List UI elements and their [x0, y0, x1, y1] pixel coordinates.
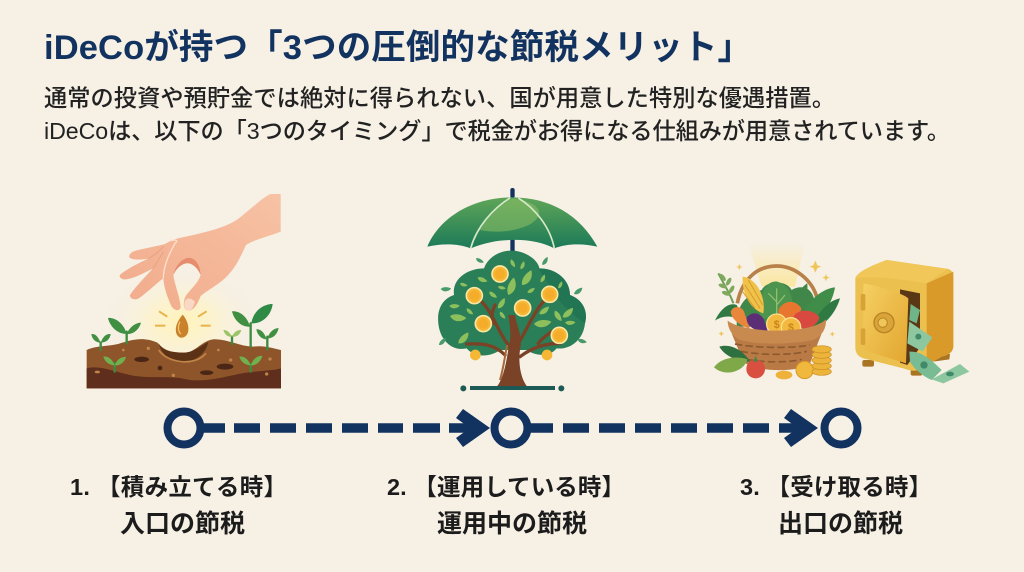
hand: [120, 194, 281, 311]
title: iDeCoが持つ「3つの圧倒的な節税メリット」: [44, 28, 752, 67]
timeline: [168, 409, 858, 447]
carrots, eggplant, tomato: [731, 307, 750, 329]
basket coins: [767, 314, 801, 337]
step 1 label: 1. 【積み立てる時】: [70, 474, 287, 500]
cash: [909, 304, 920, 323]
step 2 marker: [494, 412, 528, 444]
step 1 label: [70, 474, 287, 538]
intro text: iDeCoは、以下の「3つのタイミング」で税金がお得になる仕組みが用意されています。: [44, 118, 950, 144]
step 3 label: [740, 474, 932, 538]
arrow: step 1 to step 2: [200, 409, 490, 447]
step 1 label: 入口の節税: [120, 510, 245, 538]
ground: [470, 386, 555, 390]
arrow: step 2 to step 3: [527, 409, 818, 447]
step 3 marker: [824, 412, 858, 444]
intro text: 通常の投資や預貯金では絶対に得られない、国が用意した特別な優遇措置。: [44, 85, 835, 111]
step 3 label: 出口の節税: [778, 510, 903, 538]
seed and rays: [176, 315, 188, 338]
step 2 label: 2. 【運用している時】: [387, 474, 625, 500]
basket: [732, 333, 822, 370]
step 3 label: 3. 【受け取る時】: [740, 474, 932, 500]
icon: umbrella over coin tree: [427, 188, 597, 391]
icon: hand planting a seed: [87, 194, 281, 388]
step 2 label: 運用中の節税: [437, 510, 587, 538]
corn: [743, 277, 764, 313]
trunk: [497, 315, 527, 386]
icon: harvest basket: [714, 243, 840, 379]
greens: [737, 282, 823, 327]
coins: [492, 266, 508, 282]
basket coins: $: [788, 322, 794, 334]
step 1 marker: [168, 412, 200, 444]
basket coins: $: [774, 319, 780, 331]
intro text: [44, 85, 950, 144]
icon: gold safe with cash: [855, 260, 969, 383]
leaves: [449, 259, 576, 345]
canopy: [438, 251, 586, 355]
sprouts: [101, 323, 267, 372]
step 2 label: [387, 474, 625, 538]
foreground: [719, 346, 750, 362]
